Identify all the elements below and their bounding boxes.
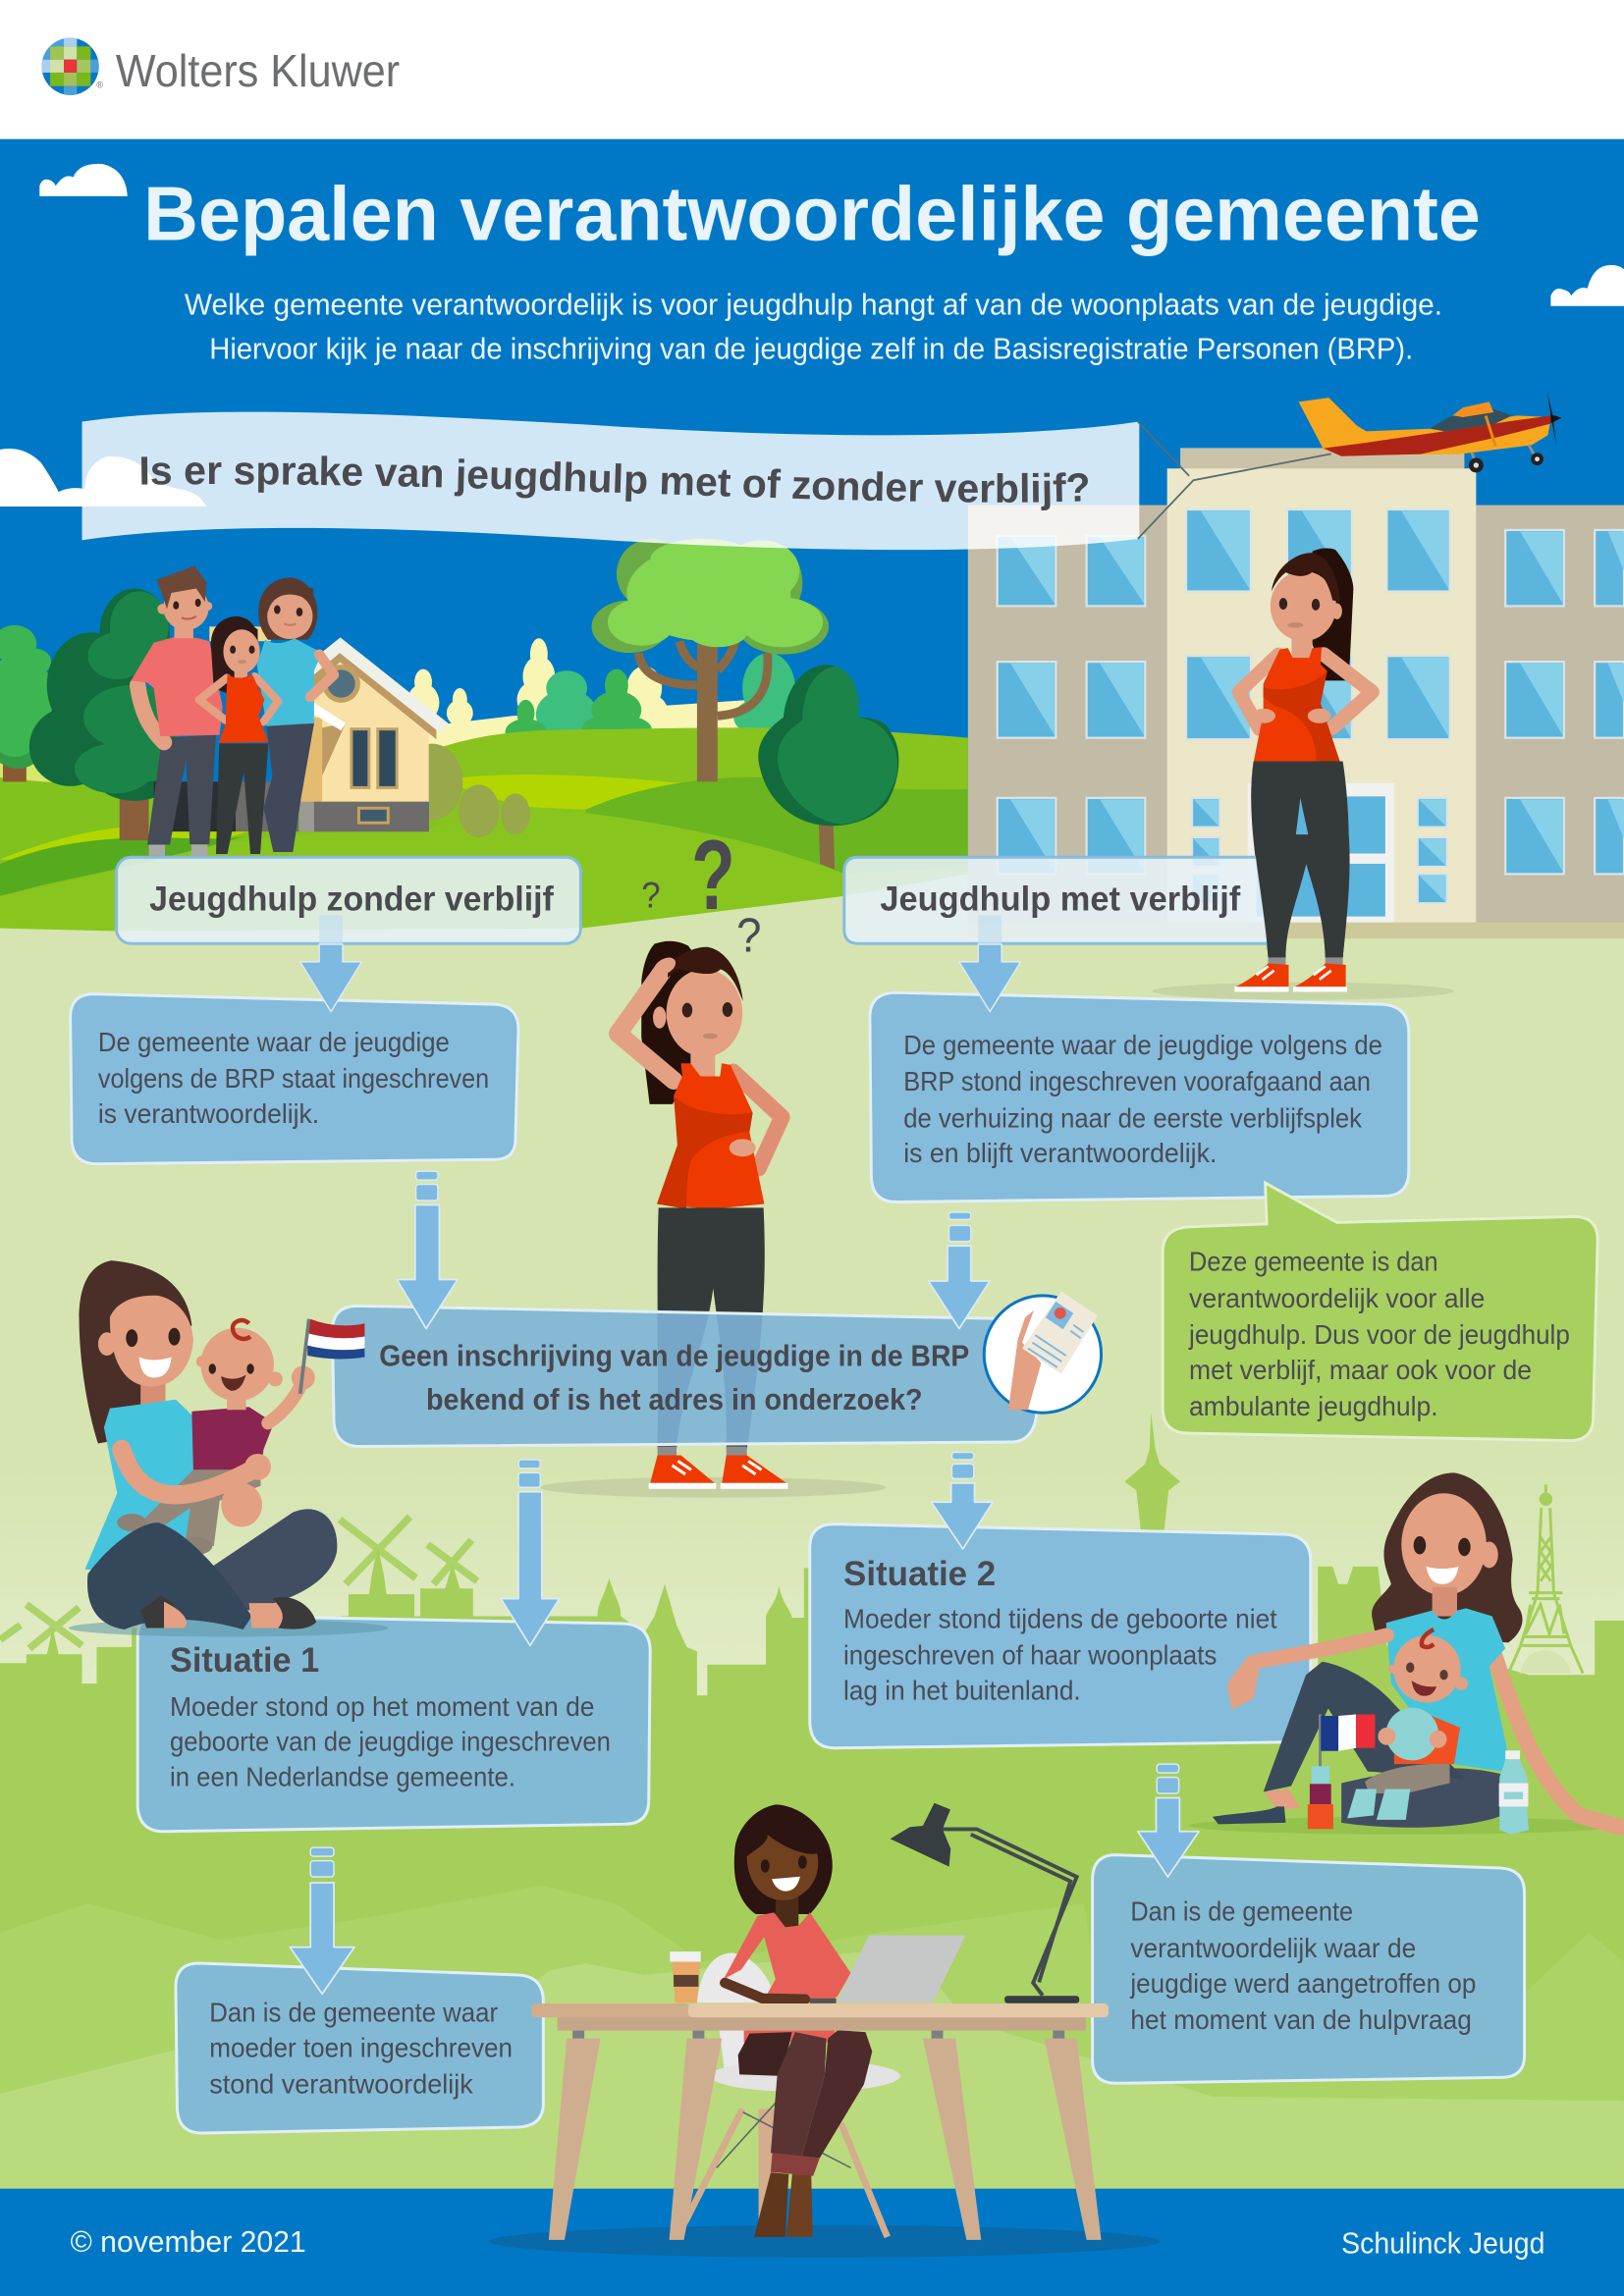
- shadow: [69, 1620, 388, 1636]
- neck: [776, 1896, 798, 1930]
- baby arm: [268, 1383, 301, 1423]
- question marks: ?: [736, 908, 762, 962]
- standing woman near building: [1153, 549, 1454, 1000]
- cream field: [426, 700, 790, 762]
- tree: left dark green: [29, 589, 185, 840]
- globe: [41, 36, 99, 98]
- ground edge over hills: [0, 874, 968, 938]
- hill dark left: [0, 834, 252, 896]
- mother with baby and Dutch flag: [69, 1260, 388, 1636]
- cloud: left behind banner: [0, 449, 206, 507]
- desk top: [531, 2003, 1109, 2031]
- hill far left: [0, 777, 439, 937]
- tree: left light green: [0, 625, 54, 781]
- lower hills: [0, 1886, 1624, 2189]
- lower body: [1341, 1768, 1502, 1828]
- logo: Wolters Kluwer: Wolters Kluwer: [116, 45, 400, 96]
- tail and body: [1299, 398, 1551, 455]
- arrow: box to question left: [397, 1171, 458, 1328]
- hands: [1252, 709, 1275, 723]
- arrow: question to situatie 2: [932, 1452, 993, 1549]
- label: Jeugdhulp met verblijf: Jeugdhulp met verblijf: [880, 881, 1241, 919]
- hair: [734, 1804, 833, 1914]
- box: green callout: verantwoordelijk voor alle: [1189, 1283, 1485, 1313]
- box: green callout: Deze gemeente is dan: [1189, 1247, 1438, 1277]
- title: Bepalen verantwoordelijke gemeente: [143, 173, 1481, 257]
- socks and boots: [754, 2153, 820, 2237]
- subtitle: [185, 289, 1442, 365]
- sweater: [724, 1912, 851, 2002]
- box: conclusie situatie 1: moeder toen ingeschreven: [209, 2032, 513, 2062]
- cockpit glass: [1431, 408, 1512, 431]
- box: conclusie situatie 2: Dan is de gemeente: [1130, 1896, 1353, 1927]
- box: conclusie situatie 1: [176, 1963, 543, 2133]
- hand on head: [651, 954, 678, 979]
- subtitle: Hiervoor kijk je naar de inschrijving van de jeugdige zelf in de Basisregistratie Personen (BRP).: [209, 332, 1413, 365]
- box: conclusie situatie 1: stond verantwoordelijk: [209, 2069, 473, 2100]
- cream pines: [407, 638, 668, 730]
- lower hills light: [0, 1948, 1624, 2189]
- banner ropes: [1138, 422, 1331, 539]
- laptop: [810, 1936, 965, 2003]
- baby shirt: [191, 1407, 274, 1469]
- skyline: [0, 1413, 1624, 2196]
- shoe: [1213, 1789, 1300, 1824]
- top: [1254, 647, 1340, 763]
- question marks: [641, 820, 762, 962]
- building: [968, 448, 1624, 938]
- mother arm: [122, 1450, 257, 1495]
- top: [657, 1063, 764, 1209]
- box: situatie 2: ingeschreven of haar woonplaats: [843, 1640, 1217, 1671]
- arrow: met verblijf to box: [959, 915, 1021, 1012]
- footer band: [0, 2189, 1624, 2296]
- landscape: hills and trees: [0, 539, 968, 938]
- label: Jeugdhulp zonder verblijf: Jeugdhulp zonder verblijf: [149, 881, 554, 919]
- box: situatie 2: [810, 1524, 1311, 1748]
- mother with baby and French flag: [1189, 1472, 1623, 1835]
- red stripe: [1324, 415, 1551, 456]
- box: situatie 1: Situatie 1: [170, 1641, 319, 1680]
- background: sky: [0, 139, 1624, 959]
- hill foreground: [0, 807, 968, 937]
- face: [1401, 1493, 1487, 1596]
- box: conclusie situatie 2: jeugdige werd aangetroffen op: [1129, 1968, 1476, 1999]
- box: gemeente volgens BRP: [71, 994, 518, 1164]
- cockpit roof: [1452, 401, 1493, 417]
- hair back: [641, 941, 703, 1104]
- bushes: [402, 744, 530, 837]
- box: gemeente volgens BRP: is verantwoordelijk.: [98, 1098, 319, 1129]
- box: green callout: met verblijf, maar ook voor de: [1189, 1355, 1532, 1385]
- windows: [998, 509, 1624, 903]
- woman scratching head: [540, 941, 886, 1498]
- fringe: [1272, 553, 1340, 602]
- box: gemeente voorafgaand aan verhuizing: [870, 992, 1409, 1201]
- raised arm: [618, 972, 674, 1081]
- box: gemeente voorafgaand aan verhuizing: is en blijft verantwoordelijk.: [903, 1138, 1217, 1168]
- hand on hip: [730, 1139, 756, 1156]
- legs of woman: [738, 2030, 872, 2158]
- shadow: [1189, 1817, 1623, 1835]
- mother shirt: [85, 1400, 212, 1574]
- girl: [199, 616, 278, 854]
- icon: hand with ID card: [984, 1291, 1102, 1413]
- face: [747, 1835, 818, 1900]
- shadow: [1153, 983, 1454, 1000]
- right arm: [1495, 1657, 1620, 1827]
- coffee cup: [670, 1951, 701, 2002]
- leggings: [658, 1207, 765, 1450]
- box: geen inschrijving question: Geen inschrijving van de jeugdige in de BRP: [379, 1339, 969, 1372]
- bottle: [1499, 1750, 1529, 1835]
- footer text left: © november 2021: [71, 2225, 306, 2259]
- raised leg: [1264, 1662, 1464, 1792]
- arms: [1239, 655, 1278, 729]
- lime field left: [0, 747, 161, 798]
- cloud: top right: [1550, 265, 1624, 306]
- cloud: top left: [39, 164, 128, 196]
- man: [131, 565, 223, 856]
- left arm: [1257, 1635, 1386, 1662]
- arrow: situatie 2 to conclusion: [1138, 1764, 1199, 1877]
- teal trees: [536, 653, 804, 739]
- shadow: [540, 1477, 886, 1498]
- footer desk shadow: [489, 2225, 1160, 2258]
- family of three: [131, 565, 334, 856]
- face: [1271, 571, 1336, 641]
- arrow: box to question right: [929, 1212, 990, 1328]
- box: green callout: [1163, 1183, 1597, 1441]
- baby: [1347, 1629, 1468, 1820]
- box: gemeente volgens BRP: De gemeente waar de jeugdige: [98, 1027, 450, 1057]
- desk legs: [549, 2031, 1102, 2240]
- box: gemeente voorafgaand aan verhuizing: BRP stond ingeschreven voorafgaand aan: [903, 1066, 1371, 1096]
- box: gemeente voorafgaand aan verhuizing: de verhuizing naar de eerste verblijfsplek: [903, 1102, 1362, 1133]
- mother legs: [190, 1509, 337, 1611]
- box: geen inschrijving question: [333, 1306, 1037, 1447]
- footer text right: Schulinck Jeugd: [1341, 2226, 1544, 2260]
- hill yellow-green left: [0, 828, 249, 864]
- logo: Wolters Kluwer: [41, 36, 400, 98]
- sweater under desk: [744, 2028, 835, 2043]
- box: conclusie situatie 2: het moment van de hulpvraag: [1130, 2004, 1472, 2035]
- box: situatie 2: lag in het buitenland.: [843, 1676, 1081, 1706]
- box: geen inschrijving question: bekend of is het adres in onderzoek?: [426, 1383, 923, 1416]
- ground strip: [968, 923, 1624, 938]
- baby pants: [140, 1469, 260, 1546]
- hill far right: [426, 727, 968, 937]
- box: situatie 1: geboorte van de jeugdige ingeschreven: [170, 1727, 611, 1757]
- leggings: [1251, 762, 1349, 957]
- box: gemeente volgens BRP: volgens de BRP staat ingeschreven: [98, 1063, 489, 1094]
- question marks: ?: [691, 820, 735, 931]
- tree: right dark green: [758, 665, 898, 870]
- hill yellow-green: [439, 774, 682, 810]
- box: situatie 2: Moeder stond tijdens de geboorte niet: [843, 1603, 1277, 1633]
- box: green callout: jeugdhulp. Dus voor de jeugdhulp: [1188, 1319, 1570, 1350]
- box: conclusie situatie 2: [1093, 1855, 1525, 2083]
- wavy banner: [82, 412, 1139, 550]
- box: green callout: ambulante jeugdhulp.: [1189, 1391, 1438, 1421]
- woman with blue shirt: [257, 577, 334, 852]
- chair: [677, 1953, 900, 2237]
- label: Jeugdhulp zonder verblijf: [117, 857, 580, 943]
- house: [154, 626, 448, 831]
- face: [667, 969, 742, 1057]
- fringe: [668, 947, 743, 1001]
- box: situatie 1: in een Nederlandse gemeente.: [170, 1762, 515, 1792]
- box: conclusie situatie 1: Dan is de gemeente waar: [209, 1998, 498, 2028]
- window highlights: [1010, 511, 1624, 902]
- entrance door: [1248, 783, 1394, 923]
- tree: large light green with branches: [592, 539, 829, 781]
- woman at desk with laptop: [531, 1803, 1109, 2240]
- eiffel tower: [1508, 1484, 1583, 1674]
- arrow: situatie 1 to conclusion: [290, 1847, 354, 1994]
- green small pines: [506, 669, 652, 745]
- blocks: [1308, 1766, 1333, 1829]
- lamp: [891, 1803, 1079, 2003]
- box: gemeente voorafgaand aan verhuizing: De gemeente waar de jeugdige volgens de: [903, 1030, 1382, 1060]
- hair: [1372, 1472, 1523, 1642]
- forearm: [725, 1983, 805, 2000]
- box: situatie 2: Situatie 2: [843, 1555, 996, 1593]
- hair back: [1313, 549, 1353, 680]
- box: situatie 1: [137, 1615, 650, 1832]
- windmill blades: [0, 1517, 477, 1648]
- woman legs over label: [1254, 834, 1350, 957]
- subtitle: Welke gemeente verantwoordelijk is voor jeugdhulp hangt af van de woonplaats van de jeugdige.: [185, 289, 1442, 322]
- hill dark right: [586, 777, 968, 937]
- french flag: [1319, 1714, 1375, 1767]
- other arm: [733, 1072, 782, 1168]
- arrow: question to situatie 1: [501, 1460, 560, 1645]
- logo: Wolters Kluwer: ®: [96, 80, 103, 89]
- banner question: Is er sprake van jeugdhulp met of zonder verblijf?: [141, 455, 1088, 510]
- label: Jeugdhulp met verblijf: [844, 857, 1269, 943]
- box: situatie 1: Moeder stond op het moment van de: [170, 1691, 595, 1722]
- airplane: [1299, 393, 1562, 472]
- tv tower: [1124, 1413, 1180, 1530]
- ground: pale green: [0, 923, 1624, 1713]
- baby head: [200, 1328, 274, 1401]
- box: conclusie situatie 2: verantwoordelijk waar de: [1130, 1933, 1416, 1963]
- shirt: [1386, 1608, 1512, 1773]
- question marks: ?: [641, 875, 661, 916]
- arrow: zonder verblijf to box: [300, 915, 361, 1012]
- dutch flag: [300, 1319, 364, 1394]
